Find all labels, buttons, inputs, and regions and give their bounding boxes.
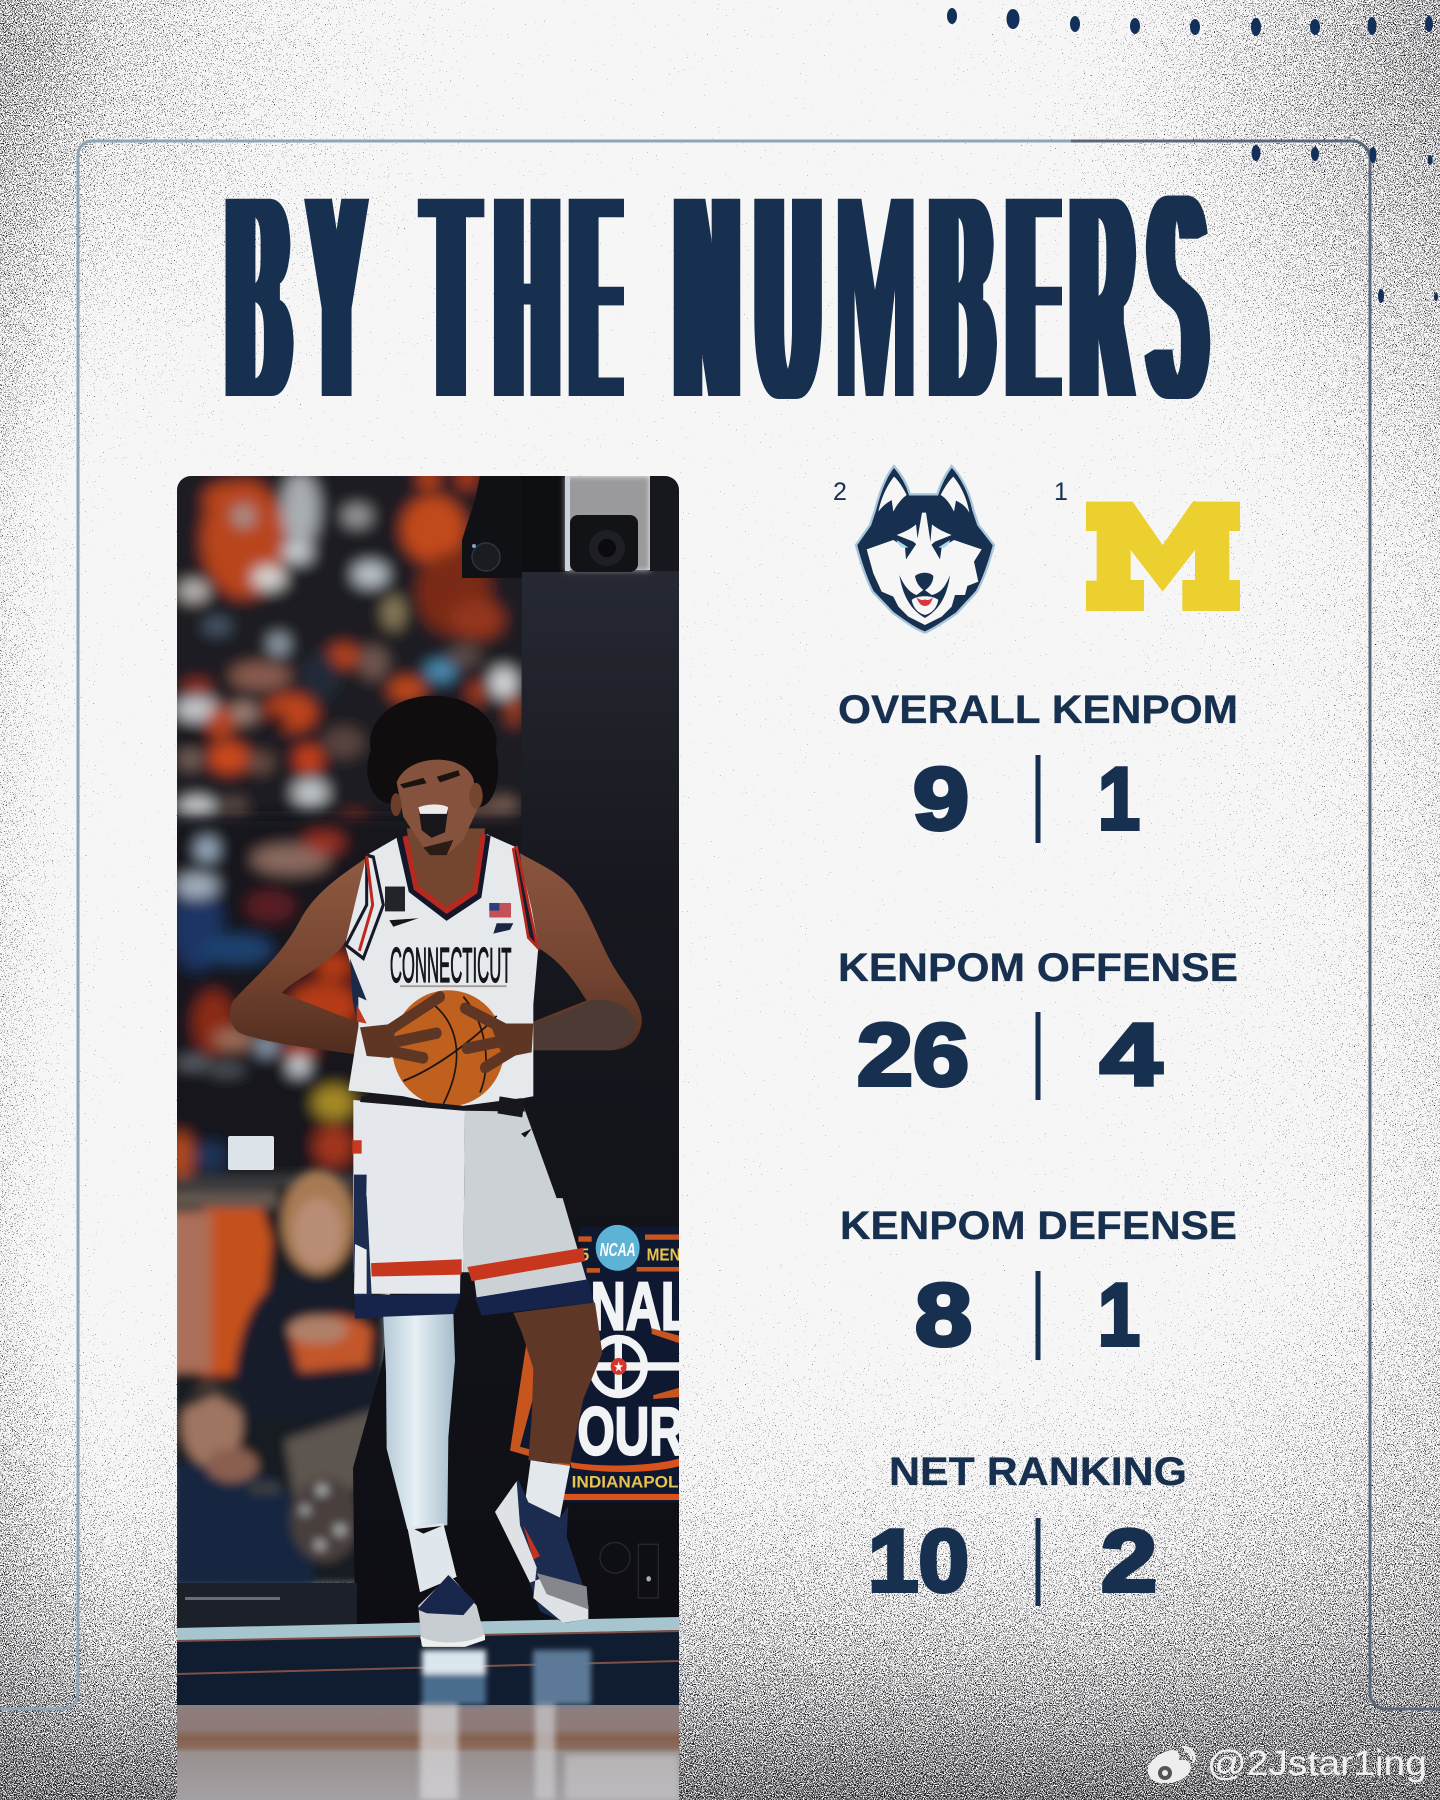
stat: overall kenpom: OVERALL KENPOM xyxy=(838,688,1238,732)
shorts hem xyxy=(370,1272,460,1294)
stat: kenpom defense: 8 xyxy=(915,1265,972,1364)
seed: Michigan: 1 xyxy=(1054,478,1068,506)
camera gear xyxy=(462,476,638,578)
lit stage pillar xyxy=(353,570,680,1625)
lower crowd xyxy=(170,1170,387,1590)
left sock xyxy=(407,1523,457,1592)
logo: Michigan block M xyxy=(1086,502,1240,611)
hair xyxy=(367,696,498,807)
stat: kenpom defense: 1 xyxy=(1098,1265,1140,1364)
player upper body xyxy=(230,696,642,1272)
right leg xyxy=(513,1303,602,1464)
final four banner: MEN xyxy=(647,1246,681,1265)
stat: overall kenpom: 1 xyxy=(1098,749,1140,848)
title: BY THE NUMBERS xyxy=(229,125,1205,471)
final four banner: NAL xyxy=(591,1267,691,1344)
stat: kenpom offense: KENPOM OFFENSE xyxy=(838,946,1238,990)
stat: net ranking: 10 xyxy=(868,1511,969,1610)
final four banner: NCAA xyxy=(600,1239,636,1260)
stat: overall kenpom: 9 xyxy=(913,749,969,848)
stat column xyxy=(833,466,1240,1610)
logo: UConn husky xyxy=(856,466,994,633)
face xyxy=(397,760,478,855)
right arm xyxy=(520,853,642,1050)
final four banner: OUR xyxy=(577,1393,684,1469)
final four banner xyxy=(510,1225,691,1598)
stat: net ranking: NET RANKING xyxy=(889,1450,1187,1494)
watermark: @2Jstar1ing xyxy=(1207,1744,1427,1783)
seed: UConn: 2 xyxy=(833,478,847,506)
player lower body xyxy=(354,1196,602,1647)
photo panel: player xyxy=(157,456,691,1800)
stat: net ranking: 2 xyxy=(1101,1511,1157,1610)
ball xyxy=(392,990,504,1107)
court floor xyxy=(177,1583,679,1800)
stat: overall kenpom xyxy=(838,688,1238,848)
stat: kenpom offense: 26 xyxy=(857,1005,969,1104)
crowd middle xyxy=(157,816,537,1216)
final four banner: ★ xyxy=(613,1360,624,1376)
decorative halftone dots xyxy=(947,8,1438,303)
left arm xyxy=(230,858,366,1054)
right sock xyxy=(525,1460,570,1518)
final four banner: INDIANAPOLI xyxy=(572,1474,683,1492)
stat: kenpom defense: KENPOM DEFENSE xyxy=(840,1204,1237,1248)
player upper body: CONNECTICUT xyxy=(390,937,511,993)
stat: kenpom offense: 4 xyxy=(1100,1005,1162,1104)
waistband and shorts top xyxy=(353,1100,465,1272)
stat: kenpom defense xyxy=(840,1204,1237,1364)
jersey xyxy=(345,834,538,1110)
left shoe xyxy=(418,1575,485,1646)
right shoe xyxy=(495,1479,588,1623)
stat: kenpom offense xyxy=(838,946,1238,1104)
crowd sign xyxy=(228,1136,274,1170)
icon: weibo xyxy=(1148,1747,1194,1783)
crowd upper xyxy=(177,476,522,829)
stat: net ranking xyxy=(868,1450,1187,1610)
left leg compression sleeve xyxy=(383,1314,455,1529)
hands xyxy=(370,997,523,1068)
neck xyxy=(406,828,485,908)
final four banner: 5 xyxy=(581,1246,589,1265)
